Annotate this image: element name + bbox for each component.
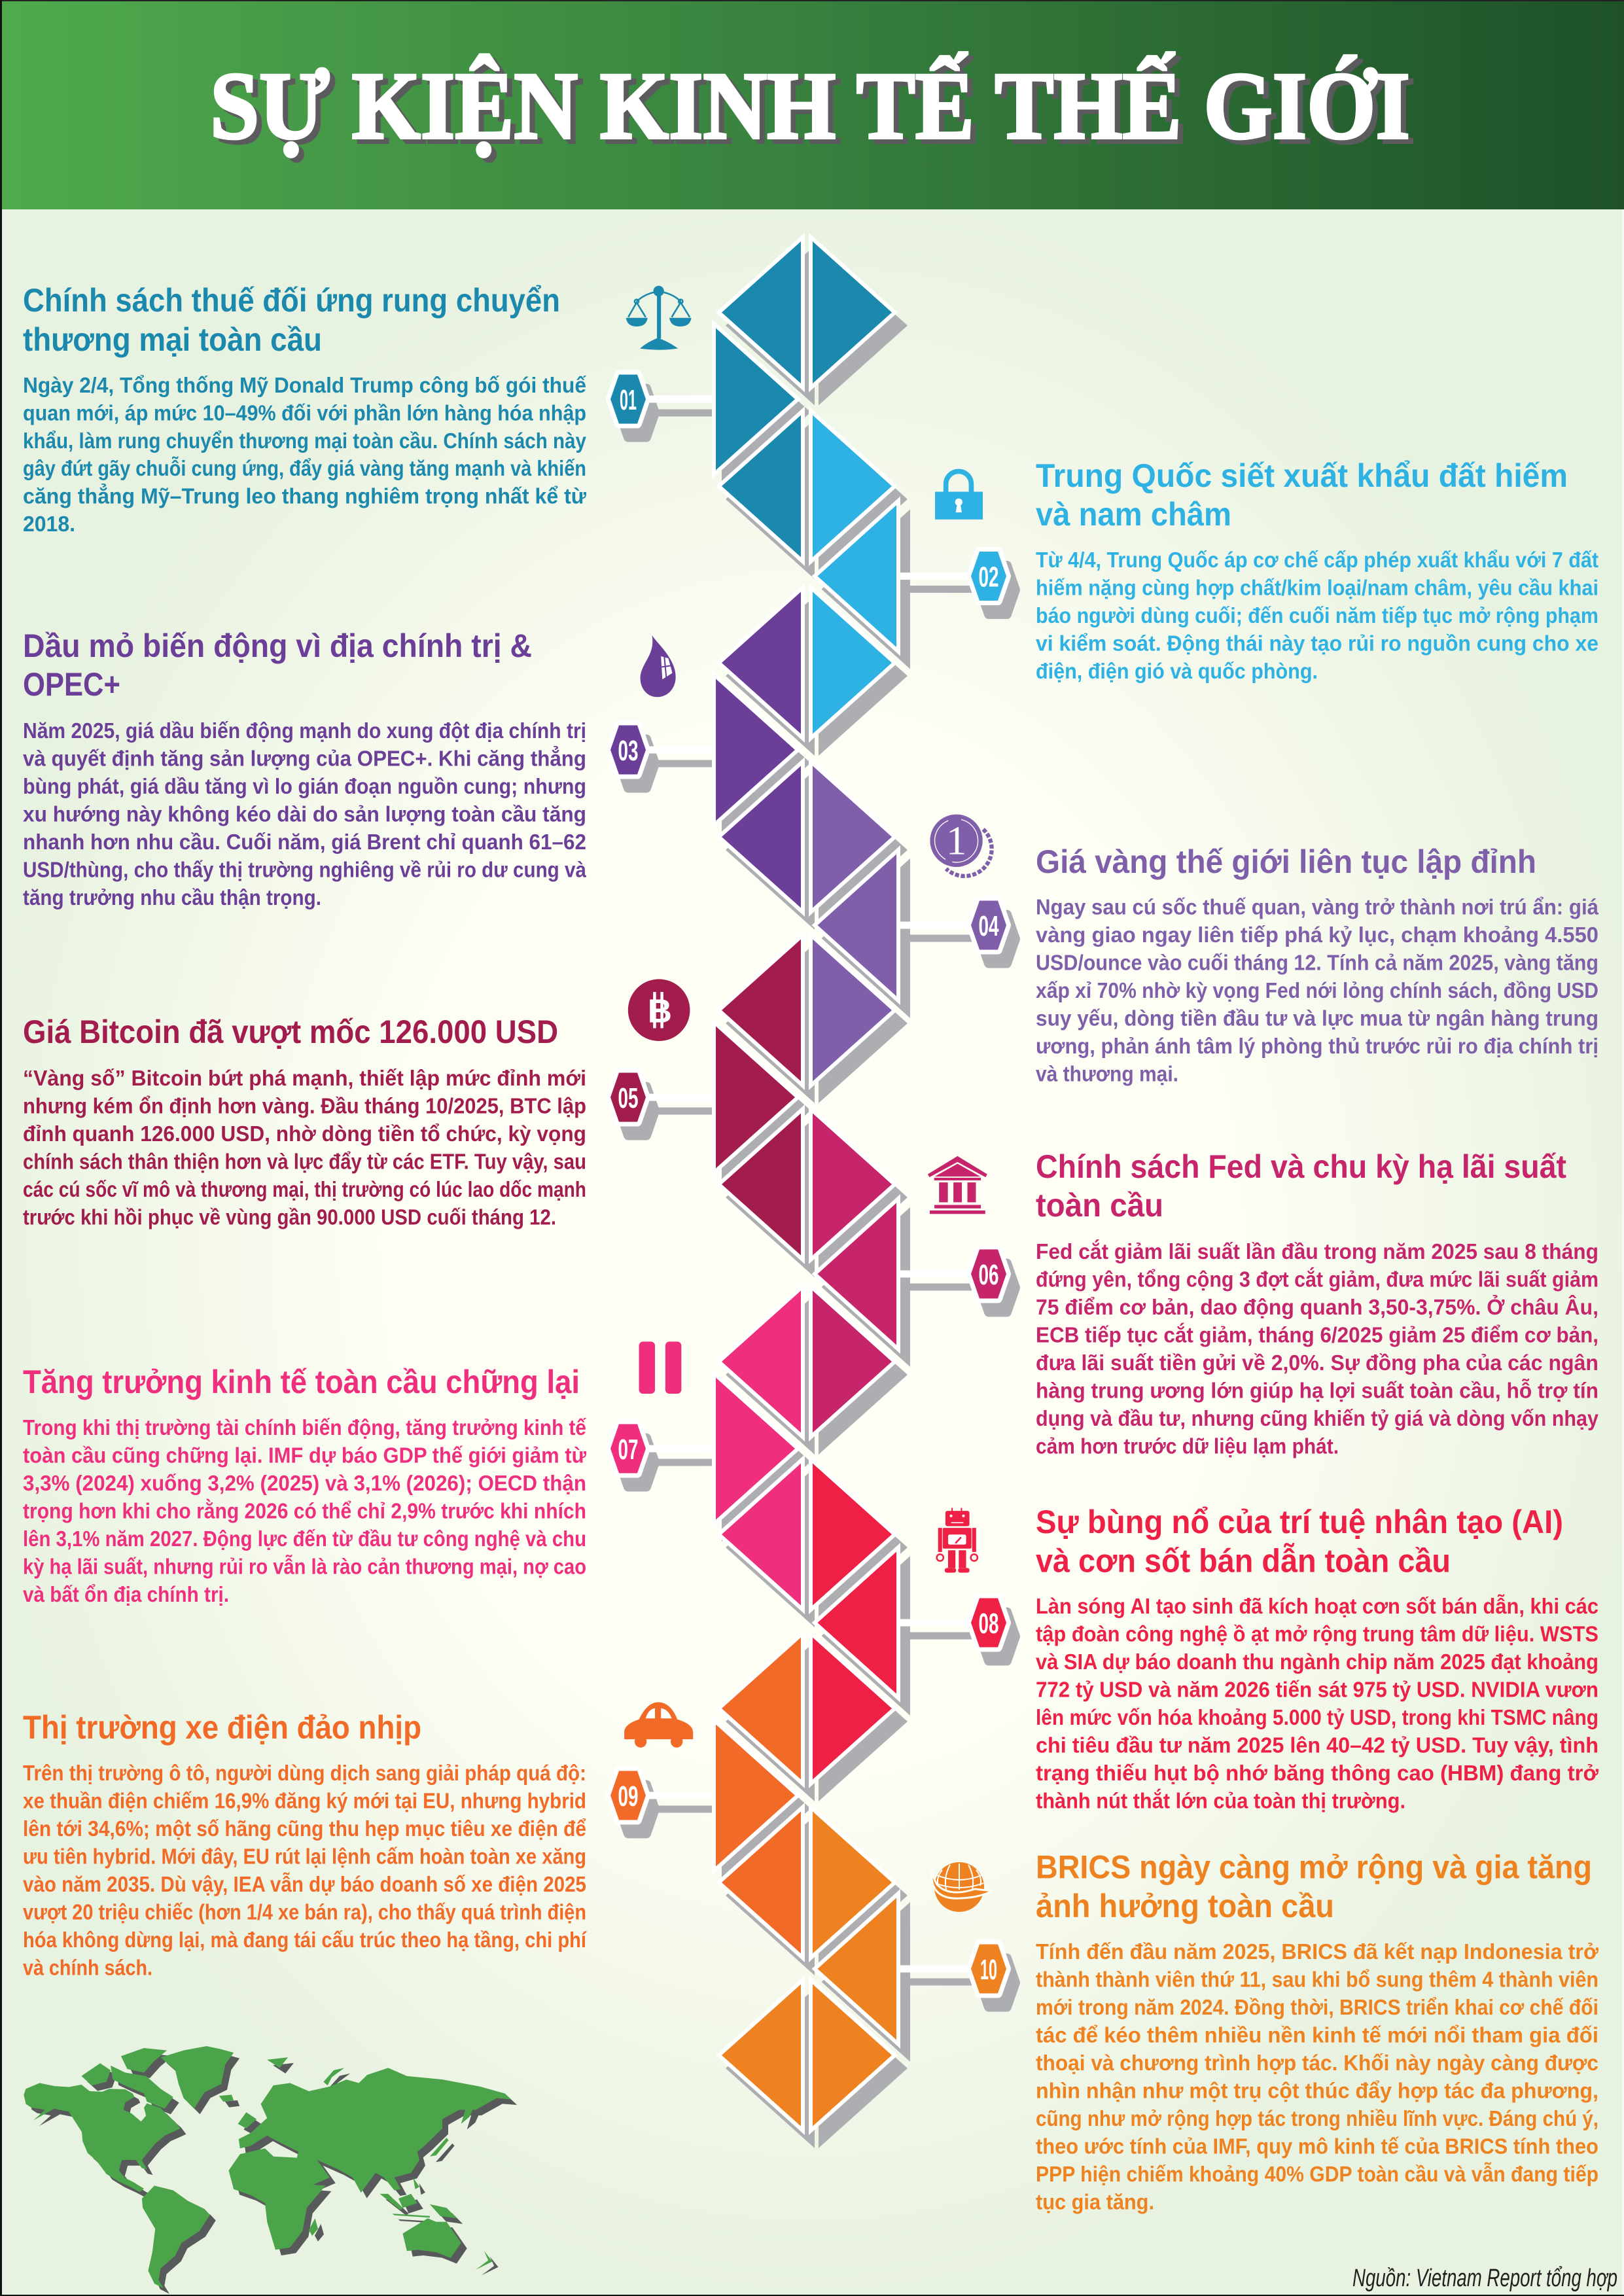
body text 08: thành nút thắt lớn của toàn thị trường. [1036,1789,1405,1812]
body text 07: và bất ổn địa chính trị. [23,1582,229,1606]
heading 05: Giá Bitcoin đã vượt mốc 126.000 USD [23,1014,558,1050]
body text 04: vàng giao ngay liên tiếp phá kỷ lục, chạm khoảng 4.550 [1036,923,1598,947]
body text 02: điện, điện gió và quốc phòng. [1036,659,1318,683]
body text 04: ương, phản ánh tâm lý phòng thủ trước rủi ro địa chính trị [1036,1034,1598,1058]
heading 07: Tăng trưởng kinh tế toàn cầu chững lại [23,1364,580,1400]
icon: coin [930,815,992,876]
body text 06: ECB tiếp tục cắt giảm, tháng 6/2025 giảm 25 điểm cơ bản, [1036,1323,1598,1347]
badge 02: 02 [979,561,998,593]
body text 08: chi tiêu đầu tư năm 2025 lên 40–42 tỷ USD. Tuy vậy, tình [1036,1733,1598,1757]
body text 04: suy yếu, dòng tiền đầu tư và lực mua từ ngân hàng trung [1036,1006,1598,1030]
body text 10: tục gia tăng. [1036,2189,1154,2214]
body text 02: hiếm nặng cùng hợp chất/kim loại/nam châm, yêu cầu khai [1036,576,1598,599]
body text 07: lên 3,1% năm 2027. Động lực đến từ đầu tư công nghệ và chu [23,1527,586,1551]
body text 05: các cú sốc vĩ mô và thương mại, thị trường có lúc lao dốc mạnh [23,1177,586,1201]
heading 01 [23,282,560,358]
panel: 09 EV market [23,1709,588,1980]
heading 02 [1036,457,1568,533]
icon: pause bars [639,1341,681,1394]
icon: coin: 1 [946,817,966,863]
body text 10: thoại và chương trình hợp tác. Khối này ngày càng được [1036,2051,1598,2075]
body text 07: 3,3% (2024) xuống 3,2% (2025) và 3,1% (2026); OECD thận [23,1471,586,1495]
panel: 01 tariff policy [23,282,587,536]
badge 06: 06 [979,1259,998,1291]
badge 07: 07 [618,1434,639,1466]
heading 10: ảnh hưởng toàn cầu [1036,1888,1334,1924]
body text 01: căng thẳng Mỹ–Trung leo thang nghiêm trọng nhất kể từ [23,484,586,508]
body text 09 [23,1761,588,1980]
panel: 05 bitcoin [23,1014,586,1229]
panel: 02 rare earths [1036,457,1598,683]
title: SỰ KIỆN KINH TẾ THẾ GIỚI [215,57,1415,164]
body text 10: tác để kéo thêm nhiều nền kinh tế mới nổi tham gia đối [1036,2023,1598,2047]
heading 06 [1036,1148,1566,1224]
heading 08: và cơn sốt bán dẫn toàn cầu [1036,1543,1451,1580]
icon: padlock [935,471,983,520]
body text 03 [23,718,587,910]
badge 03: 03 [618,735,639,767]
icon: car [624,1703,693,1748]
body text 05 [23,1066,586,1229]
heading 03: Dầu mỏ biến động vì địa chính trị & [23,627,532,664]
heading 01: thương mại toàn cầu [23,321,322,358]
badge 10 [900,1945,1015,2007]
panel: 04 gold [1036,843,1599,1086]
icon: globe with arrow [932,1862,993,1912]
header band [0,0,1624,209]
body text 06: hàng trung ương lớn giúp hạ lợi suất toàn cầu, hỗ trợ tín [1036,1378,1598,1403]
badge 05 [610,1073,712,1136]
body text 07 [23,1415,587,1606]
body text 09: Trên thị trường ô tô, người dùng dịch sang giải pháp quá độ: [23,1761,586,1785]
body text 09: ưu tiên hybrid. Mới đây, EU rút lại lệnh cấm hoàn toàn xe xăng [23,1844,586,1869]
heading 10: BRICS ngày càng mở rộng và gia tăng [1036,1849,1592,1886]
panel: 03 oil [23,627,587,910]
badge 07 [610,1424,712,1487]
world map [24,2046,517,2294]
body text 08: 772 tỷ USD và năm 2026 tiến sát 975 tỷ USD. NVIDIA vươn [1036,1678,1598,1701]
body text 07: Trong khi thị trường tài chính biến động, tăng trưởng kinh tế [23,1415,587,1439]
heading 02: Trung Quốc siết xuất khẩu đất hiếm [1036,457,1568,494]
body text 01: Ngày 2/4, Tổng thống Mỹ Donald Trump công bố gói thuế [23,373,587,397]
body text 08: Làn sóng AI tạo sinh đã kích hoạt cơn sốt bán dẫn, khi các [1036,1594,1598,1618]
badge 08 [900,1598,1015,1661]
body text 08: tập đoàn công nghệ ồ ạt mở rộng trung tâm dữ liệu. WSTS [1036,1621,1598,1646]
badge 05: 05 [618,1082,639,1114]
heading 10 [1036,1849,1592,1924]
body text 06: đưa lãi suất tiền gửi về 2,0%. Sự đồng pha của các ngân [1036,1351,1598,1375]
body text 08 [1036,1594,1599,1812]
body text 01: khẩu, làm rung chuyển thương mại toàn cầu. Chính sách này [23,429,587,453]
heading 08: Sự bùng nổ của trí tuệ nhân tạo (AI) [1036,1504,1563,1540]
body text 09: lên tới 34,6%; một số hãng cũng thu hẹp mục tiêu xe điện để [23,1816,586,1841]
panel: 06 Fed [1036,1148,1599,1458]
panel: 10 BRICS [1036,1849,1599,2214]
icon: bitcoin [628,979,690,1041]
body text 07: trọng hơn khi cho rằng 2026 có thể chỉ 2,9% trước khi nhích [23,1498,586,1523]
heading 06: Chính sách Fed và chu kỳ hạ lãi suất [1036,1148,1566,1185]
body text 01: quan mới, áp mức 10–49% đối với phần lớn hàng hóa nhập [23,400,586,425]
badge 08: 08 [979,1608,998,1640]
body text 10: Tính đến đầu năm 2025, BRICS đã kết nạp Indonesia trở [1036,1939,1599,1964]
heading 02: và nam châm [1036,496,1231,533]
icon: bitcoin: B [648,992,672,1029]
heading 06: toàn cầu [1036,1187,1163,1224]
body text 05: trước khi hồi phục về vùng gần 90.000 USD cuối tháng 12. [23,1205,556,1229]
icon: oil drop [641,635,676,697]
badge 01 [610,374,712,437]
heading 04: Giá vàng thế giới liên tục lập đỉnh [1036,843,1536,880]
heading 08 [1036,1504,1563,1580]
body text 04 [1036,895,1599,1086]
badge 06 [900,1250,1015,1313]
heading 03 [23,627,532,703]
title: SỰ KIỆN KINH TẾ THẾ GIỚI [210,52,1410,159]
badge 09 [610,1771,712,1833]
heading 01: Chính sách thuế đối ứng rung chuyển [23,282,560,319]
icon: robot [937,1508,978,1572]
body text 01: 2018. [23,512,75,536]
badge 01: 01 [620,384,637,416]
body text 06: 75 điểm cơ bản, dao động quanh 3,50-3,75%. Ở châu Âu, [1036,1295,1598,1319]
body text 07: toàn cầu cũng chững lại. IMF dự báo GDP thế giới giảm từ [23,1443,586,1467]
body text 03: USD/thùng, cho thấy thị trường nghiêng về rủi ro dư cung và [23,857,587,882]
body text 08: trạng thiếu hụt bộ nhớ băng thông cao (HBM) đang trở [1036,1761,1599,1785]
body text 02 [1036,548,1598,683]
badge 04 [900,900,1015,963]
body text 10: theo ước tính của IMF, quy mô kinh tế của BRICS tính theo [1036,2134,1598,2158]
body text 03: Năm 2025, giá dầu biến động mạnh do xung đột địa chính trị [23,718,586,743]
body text 08: và SIA dự báo doanh thu ngành chip năm 2025 đạt khoảng [1036,1650,1598,1674]
body text 03: xu hướng này không kéo dài do sản lượng toàn cầu tăng [23,802,586,826]
body text 10: nhìn nhận như một trụ cột thúc đẩy hợp tác đa phương, [1036,2078,1598,2103]
body text 04: Ngay sau cú sốc thuế quan, vàng trở thành nơi trú ẩn: giá [1036,895,1599,919]
timeline spine triangles [716,241,896,2127]
badge 09: 09 [618,1780,639,1812]
body text 09: vượt 20 triệu chiếc (hơn 1/4 xe bán ra), cho thấy quá trình điện [23,1900,586,1924]
body text 09: vào năm 2035. Dù vậy, IEA vẫn dự báo doanh số xe điện 2025 [23,1872,586,1896]
panel: 07 global growth [23,1364,587,1606]
icon: scales [626,286,692,350]
body text 01: gây đứt gãy chuỗi cung ứng, đẩy giá vàng tăng mạnh và khiến [23,456,586,480]
heading 09: Thị trường xe điện đảo nhịp [23,1709,421,1746]
body text 05: chính sách thân thiện hơn và lực đẩy từ các ETF. Tuy vậy, sau [23,1149,586,1174]
body text 05: “Vàng số” Bitcoin bứt phá mạnh, thiết lập mức đỉnh mới [23,1066,586,1090]
body text 10 [1036,1939,1599,2214]
body text 04: và thương mại. [1036,1061,1178,1086]
body text 05: đỉnh quanh 126.000 USD, nhờ dòng tiền tổ chức, kỳ vọng [23,1122,586,1146]
body text 06 [1036,1239,1599,1458]
badge 04: 04 [979,910,999,942]
body text 07: kỳ hạ lãi suất, nhưng rủi ro vẫn là rào cản thương mại, nợ cao [23,1555,586,1578]
body text 05: nhưng kém ổn định hơn vàng. Đầu tháng 10/2025, BTC lập [23,1094,586,1118]
panel: 08 AI [1036,1504,1599,1812]
body text 03: bùng phát, giá dầu tăng vì lo gián đoạn nguồn cung; nhưng [23,774,586,798]
body text 02: vi kiểm soát. Động thái này tạo rủi ro nguồn cung cho xe [1036,631,1598,656]
timeline spine shadows [726,255,906,2140]
body text 01 [23,373,587,536]
body text 09: hóa không dừng lại, mà đang tái cấu trúc theo hạ tầng, chi phí [23,1928,588,1952]
body text 06: cảm hơn trước dữ liệu lạm phát. [1036,1434,1339,1458]
badge 02 [900,552,1015,614]
body text 03: tăng trưởng nhu cầu thận trọng. [23,885,321,910]
heading 03: OPEC+ [23,666,120,703]
icon: bank [928,1156,987,1214]
body text 03: và quyết định tăng sản lượng của OPEC+. Khi căng thẳng [23,746,586,771]
body text 03: nhanh hơn nhu cầu. Cuối năm, giá Brent chỉ quanh 61–62 [23,830,586,854]
body text 06: Fed cắt giảm lãi suất lần đầu trong năm 2025 sau 8 tháng [1036,1239,1598,1263]
badge 10: 10 [980,1954,997,1986]
body text 09: và chính sách. [23,1955,152,1980]
body text 09: xe thuần điện chiếm 16,9% đăng ký mới tại EU, nhưng hybrid [23,1789,586,1812]
badge 03 [610,725,712,788]
